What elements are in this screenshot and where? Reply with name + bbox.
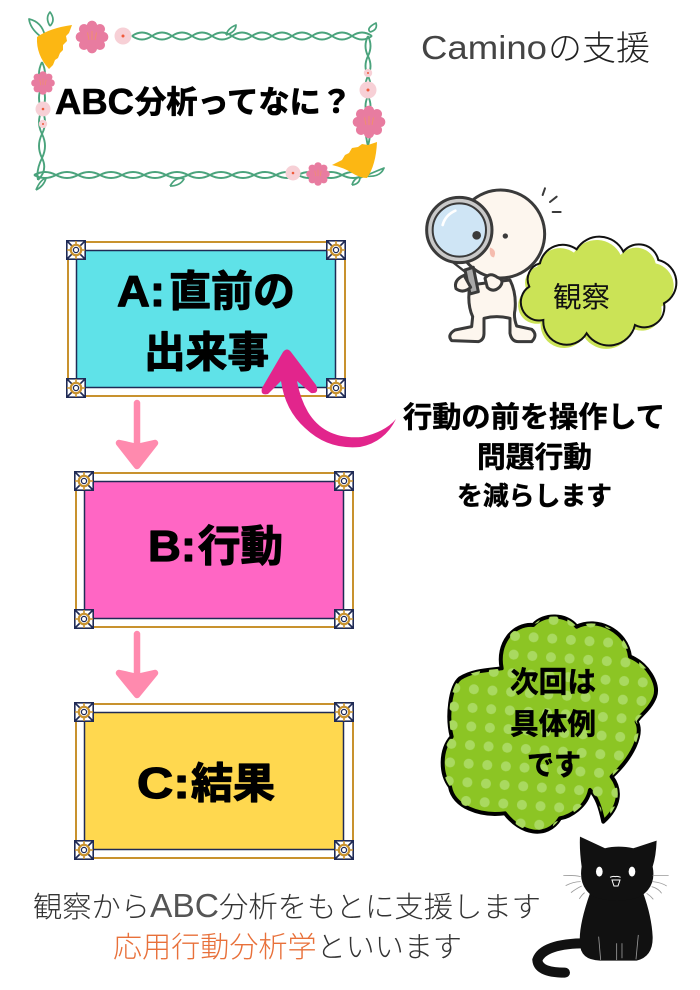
character with magnifier: [427, 188, 561, 342]
bottom note: 観察から: [33, 884, 150, 926]
mouth: [610, 876, 621, 886]
title frame with flowers: [29, 12, 385, 190]
flowers: [31, 21, 385, 186]
box A label: [117, 258, 295, 380]
box A label: 直前の: [169, 258, 295, 319]
eyes: [596, 867, 635, 877]
cloud fill: [518, 240, 674, 349]
box C label: C:: [137, 759, 190, 808]
box B label: 行動: [198, 513, 283, 574]
head: [580, 837, 657, 901]
box C: [75, 703, 353, 859]
callout text: [403, 394, 665, 513]
bubble text: です: [527, 742, 581, 784]
icon: yellow leaf top-left: [37, 25, 72, 69]
bottom note: ABC: [150, 887, 219, 924]
box B label: B:: [148, 522, 196, 571]
tail: [537, 943, 587, 973]
bubble text: [510, 659, 596, 784]
head: [457, 190, 545, 278]
box C label: 結果: [191, 750, 275, 811]
heading: 分析ってなに？: [135, 77, 352, 122]
bottom note: [33, 884, 541, 966]
box A: [67, 241, 345, 397]
bottom note second line: 応用行動分析学といいます: [113, 924, 462, 966]
cloud: observation: [518, 237, 676, 349]
nose: [490, 247, 495, 257]
magnifier handle: [450, 260, 465, 272]
arrow: B to C: [119, 634, 155, 695]
bubble text: 次回は: [510, 659, 596, 701]
bottom note: 分析をもとに支援します: [219, 884, 541, 926]
box C label: [137, 750, 275, 811]
box B label: [148, 513, 283, 574]
whiskers: [563, 875, 669, 960]
header: Camino: の支援: [548, 21, 650, 70]
box A label: 出来事: [144, 319, 269, 380]
body: [450, 280, 535, 342]
curved magenta arrow: [262, 350, 396, 447]
icon: yellow leaf bottom-right: [332, 142, 377, 178]
box A label: A:: [117, 267, 165, 316]
black cat: [537, 837, 669, 973]
hands: [455, 275, 471, 291]
arrow: A to B: [119, 403, 155, 466]
body: [580, 893, 653, 961]
callout text: 問題行動: [477, 434, 592, 476]
box B: [75, 472, 353, 628]
surprise marks: [543, 188, 561, 212]
callout text: を減らします: [457, 476, 612, 513]
heading: ABC: [55, 81, 134, 122]
header: Camino: Camino: [421, 29, 547, 66]
small eye: [503, 233, 508, 239]
callout text: 行動の前を操作して: [403, 394, 665, 436]
cloud label: 観察: [553, 275, 610, 316]
header: Camino: [421, 21, 650, 70]
vine border: [29, 12, 384, 190]
cloud outline: [521, 237, 676, 345]
magnifier lens: [427, 197, 492, 263]
bubble text: 具体例: [510, 701, 596, 743]
speech bubble: next time: [443, 616, 656, 832]
